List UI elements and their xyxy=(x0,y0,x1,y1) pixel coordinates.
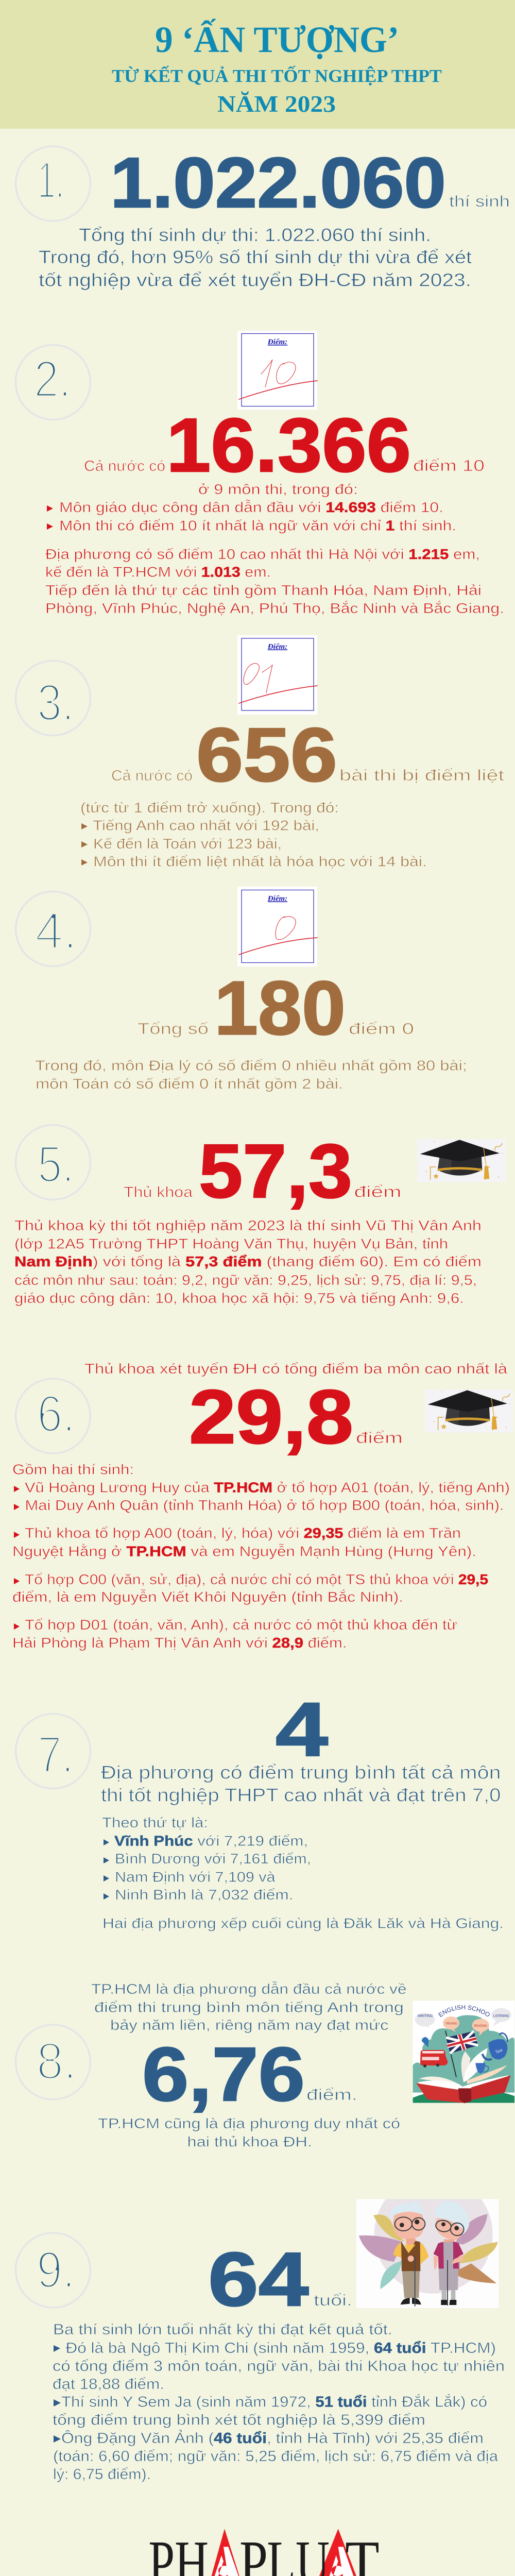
big number 57,3: 57,3 xyxy=(199,1129,352,1214)
detail list: Nguyệt Hằng ở TP.HCM và em Nguyễn Mạnh Hùng (Hưng Yên). xyxy=(12,1544,476,1560)
icon: graduation cap xyxy=(417,1139,506,1182)
panel: 2 perfect scores xyxy=(15,331,504,616)
number badge 2 xyxy=(15,345,91,419)
intro text: bảy năm liền, riêng năm nay đạt mức xyxy=(110,2017,388,2033)
label Thủ khoa: Thủ khoa xyxy=(124,1184,193,1200)
closing text: TP.HCM cũng là địa phương duy nhất có xyxy=(98,2115,400,2131)
number badge 1: 1. xyxy=(38,151,64,209)
big number 6,76: 6,76 xyxy=(142,2032,305,2117)
big number 4: 4 xyxy=(276,1687,328,1772)
unit điểm 0: điểm 0 xyxy=(349,1020,414,1038)
big number 1.022.060: 1.022.060 xyxy=(110,143,446,223)
label Cả nước có: Cả nước có xyxy=(84,458,165,474)
panel: 9 oldest candidates xyxy=(15,2175,505,2483)
panel: 5 valedictorian xyxy=(14,1125,506,1306)
unit thí sinh: thí sinh xyxy=(449,192,510,210)
title line 3: NĂM 2023 xyxy=(217,91,336,117)
detail list: Tiếp đến là thứ tự các tỉnh gồm Thanh Hóa, Nam Định, Hải xyxy=(45,582,482,598)
description text: giáo dục công dân: 10, khoa học xã hội: 9,75 và tiếng Anh: 9,6. xyxy=(14,1290,464,1306)
number badge 6 xyxy=(15,1379,91,1453)
description text xyxy=(14,1217,482,1306)
description text: đạt 18,88 điểm. xyxy=(53,2376,164,2393)
detail list xyxy=(80,800,427,870)
ranking list: Ninh Bình là 7,032 điểm. xyxy=(115,1887,294,1903)
ranking list: Hai địa phương xếp cuối cùng là Đăk Lăk và Hà Giang. xyxy=(102,1916,504,1931)
panel: 1 total candidates xyxy=(15,143,510,291)
description text: Đó là bà Ngô Thị Kim Chi (sinh năm 1959, 64 tuổi TP.HCM) xyxy=(66,2340,496,2357)
detail list: Vũ Hoàng Lương Huy của TP.HCM ở tổ hợp A01 (toán, lý, tiếng Anh) xyxy=(25,1480,510,1495)
unit tuổi: tuổi. xyxy=(314,2291,352,2309)
panel: 7 top provinces xyxy=(15,1687,504,1931)
title line 2: TỪ KẾT QUẢ THI TỐT NGHIỆP THPT xyxy=(112,65,442,86)
label Cả nước có: Cả nước có xyxy=(111,768,193,784)
detail list: ở 9 môn thi, trong đó: xyxy=(198,481,358,497)
description text: (lớp 12A5 Trường THPT Hoàng Văn Thụ, huyện Vụ Bản, tỉnh xyxy=(14,1235,448,1252)
subtitle xyxy=(101,1761,501,1806)
intro text: điểm thi trung bình môn tiếng Anh trong xyxy=(94,1999,404,2015)
icon: graduation cap xyxy=(425,1389,513,1432)
title header xyxy=(0,0,515,129)
icon: exam paper score 0: Điểm: xyxy=(267,894,287,903)
number badge 5: 5. xyxy=(38,1136,74,1193)
description text: Nam Định ) với tổng là 57,3 điểm (thang điểm 60). Em có điểm xyxy=(14,1253,482,1269)
number badge 5 xyxy=(15,1125,91,1199)
ranking list: Bình Dương với 7,161 điểm, xyxy=(115,1851,311,1867)
detail list: Gồm hai thí sinh: xyxy=(12,1462,134,1478)
description text: môn Toán có số điểm 0 ít nhất gồm 2 bài. xyxy=(36,1076,343,1092)
description text: có tổng điểm 3 môn toán, ngữ văn, bài thi Khoa học tự nhiên xyxy=(53,2358,505,2375)
detail list: Kế đến là Toán với 123 bài, xyxy=(93,836,282,852)
detail list xyxy=(45,481,504,616)
number badge 7: 7. xyxy=(38,1726,74,1784)
detail list: Tiếng Anh cao nhất với 192 bài, xyxy=(93,817,319,834)
closing text xyxy=(98,2115,400,2150)
detail list: điểm, là em Nguyễn Viết Khôi Nguyên (tỉnh Bắc Ninh). xyxy=(12,1589,403,1605)
detail list: Môn thi ít điểm liệt nhất là hóa học với 14 bài. xyxy=(93,853,427,870)
description text: tốt nghiệp vừa để xét tuyển ĐH-CĐ năm 2023. xyxy=(39,270,471,291)
panel: 3 failing scores xyxy=(15,635,505,870)
subtitle: Địa phương có điểm trung bình tất cả môn xyxy=(101,1761,501,1783)
icon: exam paper score 0 xyxy=(237,887,317,967)
big number 180: 180 xyxy=(214,965,346,1051)
number badge 9 xyxy=(15,2233,91,2308)
description text xyxy=(39,225,472,291)
title line 1: 9 ‘ẤN TƯỢNG’ xyxy=(155,19,399,60)
number badge 2: 2. xyxy=(34,350,71,408)
detail list: Tổ hợp C00 (văn, sử, địa), cả nước chỉ có một TS thủ khoa với 29,5 xyxy=(25,1571,488,1587)
logo: Pháp Luật xyxy=(148,2528,380,2576)
detail list: Môn thi có điểm 10 ít nhất là ngữ văn với chỉ 1 thí sinh. xyxy=(59,517,456,534)
detail list: Môn giáo dục công dân dẫn đầu với 14.693 điểm 10. xyxy=(59,499,443,515)
detail list: kế đến là TP.HCM với 1.013 em. xyxy=(45,564,271,580)
big number 16.366: 16.366 xyxy=(166,403,411,488)
detail list: Địa phương có số điểm 10 cao nhất thì Hà Nội với 1.215 em, xyxy=(45,546,480,562)
icon: elderly couple xyxy=(356,2199,499,2308)
unit điểm: điểm. xyxy=(306,2086,357,2104)
icon: english school book: Tea xyxy=(494,2047,503,2055)
number badge 7 xyxy=(15,1714,91,1789)
number badge 8 xyxy=(15,2025,91,2099)
big number 64: 64 xyxy=(208,2237,309,2322)
detail list: Phòng, Vĩnh Phúc, Nghệ An, Phú Thọ, Bắc Ninh và Bắc Giang. xyxy=(45,600,504,616)
icon: english school book: READING xyxy=(474,2024,487,2028)
description text: các môn như sau: toán: 9,2, ngữ văn: 9,25, lịch sử: 9,75, địa lí: 9,5, xyxy=(14,1272,477,1288)
number badge 9: 9. xyxy=(37,2241,75,2299)
description text: Ông Đặng Văn Ảnh ( 46 tuổi , tỉnh Hà Tĩnh) với 25,35 điểm xyxy=(61,2429,484,2447)
closing text: hai thủ khoa ĐH. xyxy=(187,2134,312,2150)
detail list: Tổ hợp D01 (toán, văn, Anh), cả nước có một thủ khoa đến từ xyxy=(25,1617,457,1633)
icon: english school book: WRITING xyxy=(418,2013,433,2018)
big number 656: 656 xyxy=(196,713,337,798)
intro text xyxy=(91,1981,407,2033)
description text xyxy=(35,1057,467,1092)
number badge 8: 8. xyxy=(37,2032,77,2090)
unit bài thi bị điểm liệt: bài thi bị điểm liệt xyxy=(339,766,505,784)
unit điểm 10: điểm 10 xyxy=(413,456,485,474)
ranking list: Nam Định với 7,109 và xyxy=(115,1869,276,1885)
icon: exam paper score 10 xyxy=(237,331,317,410)
description text: Thí sinh Y Sem Ja (sinh năm 1972, 51 tuổi tỉnh Đắk Lắk) có xyxy=(61,2394,487,2410)
description text xyxy=(53,2321,505,2483)
detail list: Thủ khoa tổ hợp A00 (toán, lý, hóa) với 29,35 điểm là em Trần xyxy=(25,1525,461,1541)
description text: Trong đó, môn Địa lý có số điểm 0 nhiều nhất gồm 80 bài; xyxy=(35,1057,467,1074)
icon: english school book: LISTENING xyxy=(493,2013,509,2018)
ranking list xyxy=(102,1815,504,1931)
big number 29,8: 29,8 xyxy=(189,1375,353,1460)
panel: 6 university admission top score xyxy=(12,1361,513,1651)
detail list: (tức từ 1 điểm trở xuống). Trong đó: xyxy=(80,800,339,816)
label Tổng số: Tổng số xyxy=(138,1020,209,1038)
icon: english school book: ENGLISH SCHOOL xyxy=(438,2005,490,2018)
description text: Trong đó, hơn 95% số thí sinh dự thi vừa để xét xyxy=(39,247,472,267)
description text: lý: 6,75 điểm). xyxy=(53,2466,151,2483)
unit điểm: điểm xyxy=(354,1183,402,1200)
detail list: Mai Duy Anh Quân (tỉnh Thanh Hóa) ở tổ hợp B00 (toán, hóa, sinh). xyxy=(25,1497,504,1513)
icon: exam paper score 10: Điểm: xyxy=(267,338,287,346)
unit điểm: điểm xyxy=(356,1429,403,1447)
number badge 6: 6. xyxy=(37,1385,75,1443)
description text: tổng điểm trung bình xét tốt nghiệp là 5,399 điểm xyxy=(53,2412,425,2429)
detail list xyxy=(12,1462,510,1651)
number badge 4 xyxy=(15,891,91,967)
icon: exam paper score 01: Điểm: xyxy=(267,643,287,651)
description text: Ba thí sinh lớn tuổi nhất kỳ thi đạt kết quả tốt. xyxy=(53,2321,392,2338)
ranking list: Theo thứ tự là: xyxy=(102,1815,208,1831)
panel: 8 english average score xyxy=(14,1981,515,2150)
number badge 3: 3. xyxy=(37,674,74,732)
icon: english school book xyxy=(413,2001,515,2103)
subtitle: thi tốt nghiệp THPT cao nhất và đạt trên 7,0 xyxy=(101,1785,501,1806)
number badge 1 xyxy=(15,146,91,221)
description text: Tổng thí sinh dự thi: 1.022.060 thí sinh. xyxy=(79,225,431,245)
number badge 4: 4. xyxy=(35,902,77,960)
number badge 3 xyxy=(15,660,91,736)
icon: exam paper score 01 xyxy=(237,635,317,715)
description text: Thủ khoa kỳ thi tốt nghiệp năm 2023 là thí sinh Vũ Thị Vân Anh xyxy=(14,1217,482,1233)
panel: 4 zero scores xyxy=(15,887,467,1092)
icon: english school book: SPEAKING xyxy=(445,2022,457,2025)
intro text: TP.HCM là địa phương dẫn đầu cả nước về xyxy=(91,1981,407,1997)
description text: (toán: 6,60 điểm; ngữ văn: 5,25 điểm, lịch sử: 6,75 điểm và địa xyxy=(53,2448,499,2465)
detail list: Hải Phòng là Phạm Thị Vân Anh với 28,9 điểm. xyxy=(12,1635,347,1651)
ranking list: Vĩnh Phúc với 7,219 điểm, xyxy=(114,1833,308,1849)
intro line: Thủ khoa xét tuyển ĐH có tổng điểm ba môn cao nhất là xyxy=(84,1361,507,1377)
